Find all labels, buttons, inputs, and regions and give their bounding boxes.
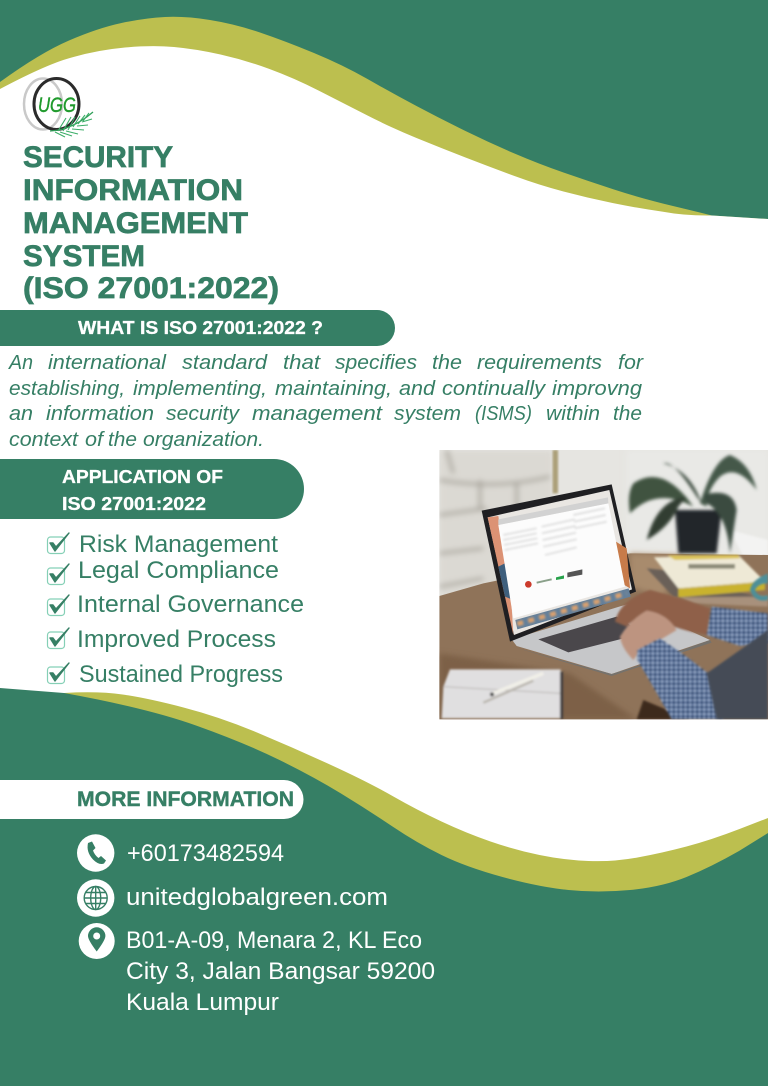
plant [629,455,757,553]
heading pill: application: ISO 27001:2022 [62,494,206,514]
title: SECURITY [23,141,173,174]
books [647,555,768,607]
hands [615,590,710,660]
item: legal compliance: Legal Compliance [78,557,279,584]
definition paragraph: within [546,403,600,425]
definition paragraph: improvng [552,378,642,400]
definition paragraph [8,352,644,451]
text: website: unitedglobalgreen.com [126,884,388,911]
definition paragraph: information [46,403,154,425]
heading pill: what is ISO: WHAT IS ISO 27001:2022 ? [78,318,323,338]
laptop screen [482,484,636,642]
heading pill: more information: MORE INFORMATION [77,788,294,811]
definition paragraph: for [618,352,644,374]
title: SYSTEM [23,240,145,273]
title: INFORMATION [23,174,243,207]
text: address: B01-A-09, Menara 2, KL Eco [126,927,422,954]
laptop base [512,603,710,674]
item: improved process: Improved Process [77,626,276,653]
definition paragraph: specifies [335,352,417,374]
definition paragraph: organization. [143,429,264,451]
heading pill: more information [0,780,304,819]
title: MANAGEMENT [23,207,248,240]
title [23,141,279,305]
text: phone number: +60173482594 [127,840,284,867]
item: risk management: Risk Management [79,531,278,558]
heading pill: application: APPLICATION OF [62,467,223,487]
photo: hands typing on a laptop [439,450,768,719]
definition paragraph: implementing, [133,378,267,400]
definition paragraph: an [9,403,33,425]
logo: UGG [24,78,93,137]
definition paragraph: maintaining, [275,378,392,400]
definition paragraph: of [85,429,106,451]
definition paragraph: the [613,403,642,425]
item: internal governance: Internal Governance [77,591,304,618]
white content area [0,46,768,900]
teal mug [750,573,768,601]
definition paragraph: and [399,378,436,400]
open notebook [442,669,563,719]
text: address [126,927,435,1016]
definition paragraph: context [9,429,80,451]
definition paragraph: continually [442,378,546,400]
bottom wave: olive band [0,692,768,1086]
definition paragraph: international [48,352,167,374]
bottom wave: green footer [0,688,768,1086]
icon: globe [77,879,114,917]
icon: location pin [79,923,115,959]
icon: phone [77,834,114,872]
definition paragraph: the [108,429,137,451]
text: address: City 3, Jalan Bangsar 59200 [126,958,435,985]
definition paragraph: (ISMS) [475,403,532,425]
definition paragraph: establishing, [9,378,125,400]
definition paragraph: system [394,403,461,425]
heading pill: application [0,459,304,519]
definition paragraph: that [283,352,322,374]
heading pill: what is ISO [0,310,395,346]
definition paragraph: the [432,352,462,374]
definition paragraph: An [8,352,33,374]
item: sustained progress: Sustained Progress [79,661,283,688]
logo: UGG: UGG [38,94,76,117]
checklist: applications [48,531,304,688]
shirt sleeves and shoulder [707,607,768,646]
definition paragraph: standard [182,352,268,374]
definition paragraph: management [252,403,384,425]
definition paragraph: requirements [477,352,602,374]
text: address: Kuala Lumpur [126,989,279,1016]
definition paragraph: security [166,403,240,425]
title: (ISO 27001:2022) [23,272,279,305]
